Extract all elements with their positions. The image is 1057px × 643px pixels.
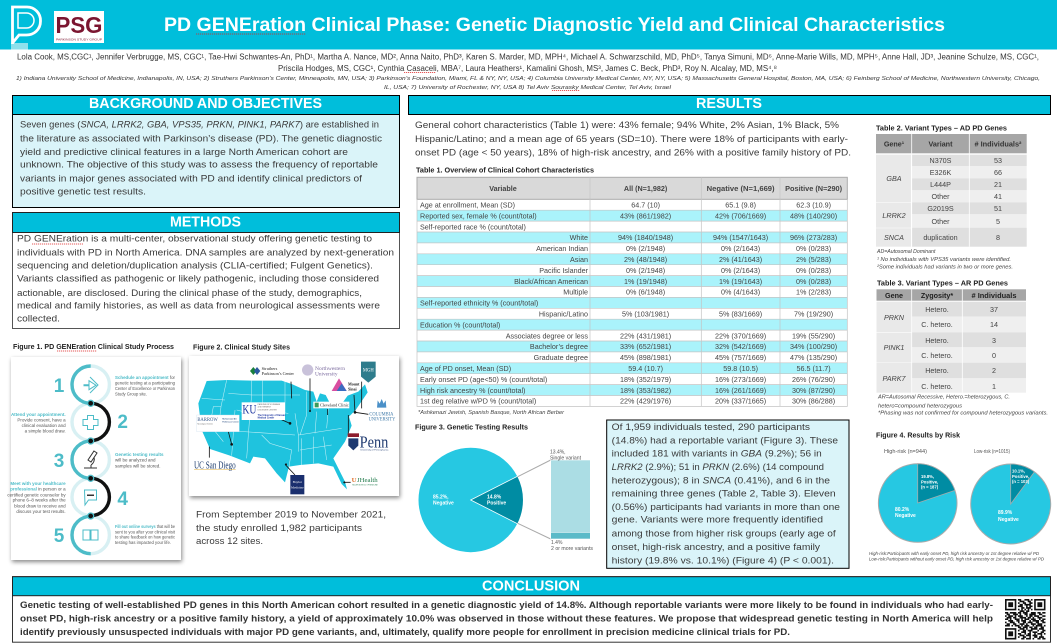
authors and affiliations [16, 52, 1040, 91]
table 2: variant types AD: Variant [929, 140, 953, 148]
table rows: Asian [570, 255, 588, 264]
pie chart: high risk: Positive, [921, 479, 938, 484]
table rows: Age at enrollment, Mean (SD) [420, 200, 515, 210]
table 2: variant types AD: duplication [923, 233, 958, 242]
QR code [1005, 599, 1046, 640]
table 2: variant types AD: 5 [996, 217, 1000, 226]
pie chart: high risk: (n = 187) [921, 484, 939, 490]
table rows [420, 200, 837, 406]
table header: All (N=1,982) [624, 184, 668, 193]
step 1 text [115, 375, 175, 396]
logo: Struthers Parkinson's Center [250, 366, 295, 376]
table rows: 22% (431/1981) [620, 331, 671, 340]
stacked bar: variant count: Single variant [550, 455, 582, 461]
text: methods: medical and family histories, as well as data from neurological assessments were [17, 301, 380, 312]
authors and affiliations: Lola Cook, MS,CGC¹, Jennifer Verbrugge, MS, CGC¹, Tae-Hwi Schwantes-An, PhD¹, Martha A. Nance, MD², Anna Naito, PhD³, Karen S. Marder, MD, MPH⁴, Michael A. Schwarzschild, MD, PhD⁵, Tanya Simuni, MD⁶, Anne-Marie Wills, MD, MPH⁵, Anne Hall, JD³, Jeanine Schulze, MS, CGC¹, [17, 52, 1039, 62]
table rows: Bachelor’s degree [530, 342, 588, 351]
panel: results text: LRRK2 (2.9%); 51 in PRKN (2.6%) (14 compound [612, 462, 824, 473]
text: methods: actionable, are disclosed. During the clinical phase of the study, demographics, [17, 288, 362, 299]
table rows: 0% (0/283) [796, 277, 831, 286]
figure 4 notes: High-risk:Participants with early onset PD, high risk ancestry or 1st degree relative w/ PD [869, 551, 1040, 556]
logo: Struthers Parkinson's Center: Struthers [262, 366, 278, 371]
table 2: variant types AD: G2019S [927, 204, 954, 213]
text: methods [17, 234, 394, 325]
pie chart: high risk: Negative [895, 513, 916, 519]
table 3: variant types AR: PINK1 [884, 343, 904, 352]
authors and affiliations: Priscila Hodges, MS, CGC¹, Cynthia Casaceli, MBA⁷, Laura Heathers¹, Kamalini Ghosh, MS³, James C. Beck, PhD³, Roy N. Alcalay, MD, MS⁴,⁸ [278, 64, 777, 73]
logo: Cleveland Clinic: Cleveland Clinic [320, 403, 349, 408]
icon: Parkinson's Foundation P logo [11, 7, 41, 50]
logo: PSG: PSG [56, 12, 102, 38]
table 3: variant types AR: Hetero. [925, 305, 949, 314]
table 3: variant types AR: 37 [990, 305, 998, 314]
table rows: 64.7 (10) [631, 200, 660, 210]
heading: methods: METHODS [170, 214, 241, 230]
table 2: variant types AD: Other [932, 192, 950, 201]
table 2 notes: ²Some individuals had variants in two or more genes. [877, 264, 1013, 270]
table rows: 33% (652/1981) [620, 342, 671, 351]
figure 4: results by risk [869, 431, 1051, 562]
table 1 footnote: *Ashkenazi Jewish, Spanish Basque, North African Berber [418, 410, 564, 416]
leader lines [209, 378, 368, 483]
table rows: 18% (353/1982) [620, 386, 671, 395]
table rows: High risk ancestry % (count/total) [420, 386, 525, 395]
logo: KU: PARKINSON'S DISEASE [258, 403, 281, 406]
caption: table 2: Table 2. Variant Types – AD PD Genes [876, 124, 1007, 133]
step 5 text: testing has impacted your life. [115, 540, 171, 545]
logo: Columbia University [369, 399, 396, 423]
logo: KU: The University of Kansas [258, 414, 286, 417]
table 3: variant types AR: # Individuals [972, 291, 1016, 300]
table rows: 16% (261/1669) [715, 386, 766, 395]
table rows: 22% (429/1976) [620, 397, 671, 406]
table rows: 42% (706/1669) [715, 211, 766, 220]
table rows: Education % (count/total) [420, 320, 500, 329]
text: methods: collected. [17, 314, 60, 325]
step 2 text: Provide consent, have a [17, 418, 66, 422]
table header: Negative (N=1,669) [707, 184, 775, 193]
pie chart: low risk: Low-risk (n=1015) [974, 449, 1010, 455]
caption: figure 1: Figure 1. PD GENEration Clinical Study Process [13, 342, 174, 351]
table rows: 30% (86/288) [792, 397, 835, 406]
table rows: 18% (352/1979) [620, 375, 671, 384]
table rows: 1% (2/283) [796, 288, 831, 297]
step numbers: 2 [117, 412, 128, 433]
panel: results text: history (19.8% vs. 10.1%) (Figure 4) (P < 0.001). [612, 555, 834, 566]
logo: Mount Sinai: Sinai [348, 387, 358, 392]
table 2: variant types AD: Gene¹ [884, 140, 905, 148]
table rows: 94% (1547/1643) [713, 233, 768, 242]
logo: Northwestern University: University [315, 372, 338, 378]
step numbers: 1 [54, 376, 65, 397]
header band [0, 0, 1057, 50]
caption: figure 3: Figure 3. Genetic Testing Results [415, 422, 528, 431]
step 4 text: professional in person or a [10, 486, 66, 492]
logo: Baylor Medicine [290, 475, 304, 494]
logo: KU: Medical Center [258, 417, 274, 420]
figure 1: clinical study process [7, 342, 181, 560]
table 3: variant types AR: 1 [992, 382, 996, 391]
table rows: Reported sex, female % (count/total) [420, 211, 537, 220]
logo: UHealth: JHealth [357, 477, 378, 484]
table rows: 59.8 (10.5) [723, 364, 758, 373]
caption: table 3: Table 3. Variant Types – AR PD Genes [877, 279, 1008, 288]
pie chart: low risk: (n = 103) [1012, 479, 1030, 484]
logo: MGH [361, 362, 376, 383]
logo: Struthers Parkinson's Center: Parkinson’s Center [262, 371, 295, 376]
text: enrollment: From September 2019 to November 2021, [196, 510, 386, 521]
table 2: variant types AD: 66 [994, 168, 1002, 177]
logo: PSG: PARKINSON STUDY GROUP [56, 38, 102, 42]
table header [417, 177, 847, 199]
logo: UC San Diego: UC San Diego [194, 460, 236, 471]
logo: Penn: Penn [360, 433, 389, 452]
table rows: Self-reported ethnicity % (count/total) [420, 299, 538, 308]
table rows: 0% (2/1643) [721, 266, 760, 275]
table 3: variant types AR [876, 279, 1048, 416]
pie chart: high risk [878, 449, 957, 542]
step 3 text [115, 452, 164, 468]
text: background: variants in major genes associated with PD and identify clinical predictors of [20, 174, 362, 185]
pie chart: high risk: 80.2% [895, 507, 910, 513]
step 1 text: Study Group site. [115, 392, 147, 396]
step 3 text: Genetic testing results [115, 452, 164, 457]
table 2: variant types AD: 8 [996, 233, 1000, 242]
map of United States with site logos [194, 362, 396, 494]
text: conclusion: identify previously unsuspected individuals with major PD gene variants, and, ultimately, qualify more people for enrollment in precision medicine clinical trials for PD. [20, 627, 790, 637]
panel: background and objectives [12, 95, 400, 208]
text: methods: individuals with PD in North America. DNA samples are analyzed by next-generation [17, 248, 394, 259]
pie chart: low risk: Positive, [1012, 474, 1029, 479]
logo: UHealth: MILLER SCHOOL OF MEDICINE [352, 484, 379, 486]
table rows: 96% (273/283) [790, 233, 837, 242]
table rows: 0% (2/1948) [626, 244, 665, 253]
table rows: 2% (5/283) [796, 255, 831, 264]
step numbers [54, 376, 128, 547]
stacked bar: variant count: 2 or more variants [551, 546, 594, 552]
step numbers: 4 [117, 489, 128, 510]
table rows: 1% (19/1643) [719, 277, 762, 286]
panel: conclusion [12, 577, 1050, 642]
table 3: variant types AR: 3 [992, 336, 996, 345]
panel: results text: remaining three genes (Table 2, Table 3). Eleven [612, 489, 836, 500]
pie chart: Positive [487, 500, 506, 506]
table 2: variant types AD: L444P [930, 180, 951, 189]
table 2: variant types AD: 53 [994, 156, 1002, 165]
figure 3: genetic testing results [415, 422, 594, 553]
step 3 text: will be analyzed and [115, 458, 156, 462]
stacked bar: variant count: 13.4%, [550, 449, 566, 455]
pie chart: low risk: 89.9% [998, 510, 1013, 516]
step 4 text: certified genetic counselor by [7, 492, 66, 497]
step 4 text: phone 6–8 weeks after the [13, 498, 66, 502]
table rows: 20% (337/1665) [715, 397, 766, 406]
panel: results text: included 181 with variants in GBA (9.2%); 56 in [612, 449, 822, 460]
panel: results text: (0.56%) participants had variants in more than one [612, 502, 840, 513]
panel: results header [408, 95, 1050, 114]
table rows: Early onset PD (age<50) % (count/total) [420, 375, 547, 384]
text: background: yield and predictive clinical features in a large North American cohort are [20, 147, 348, 158]
text: enrollment [196, 510, 386, 547]
logo: Mount Sinai: Mount [348, 382, 360, 387]
table 3: variant types AR: 2 [992, 366, 996, 375]
table rows: 0% (4/1643) [721, 288, 760, 297]
pie chart: low risk: 10.1%, [1012, 469, 1025, 474]
table 3: variant types AR: 0 [992, 351, 996, 360]
step 4 text: discuss your test results. [16, 509, 66, 514]
logo: Columbia University: UNIVERSITY [369, 418, 396, 423]
table rows: Multiple [563, 288, 588, 297]
table 3: variant types AR: 14 [990, 320, 998, 329]
text: general cohort characteristics: Hispanic/Latino; and a mean age of 65 years (SD=10). There were 18% of participants with early- [415, 134, 848, 145]
step 5 text: sent to you after your clinical visit [115, 529, 176, 534]
heading: conclusion: CONCLUSION [482, 578, 580, 594]
table rows: 5% (103/1981) [622, 310, 669, 318]
step 1 text: Schedule an appointment for [115, 375, 175, 380]
logo: Barrow [197, 415, 239, 432]
step 4 text: blood draw to receive and [14, 503, 66, 508]
logo: Cleveland Clinic [313, 402, 349, 408]
table 3 notes: AR=Autosomal Recessive, Hetero.=heterozygous, C. [877, 394, 1010, 400]
pie chart: 14.8% [487, 494, 502, 500]
table 3: variant types AR: PRKN [884, 313, 905, 322]
table rows: Age of PD onset, Mean (SD) [420, 364, 511, 373]
panel: results text: heterozygous); 8 in SNCA (0.41%), and 6 in the [612, 475, 830, 486]
text: background: the literature as associated with Parkinson’s disease (PD). The genetic diagnostic [20, 134, 382, 145]
logo: Baylor Medicine: Baylor [293, 480, 303, 484]
logo: Columbia University: COLUMBIA [369, 412, 394, 417]
table rows: 5% (83/1669) [719, 310, 762, 318]
logo: KU: KU [242, 403, 256, 417]
step 2 text: clinical evaluation and [22, 423, 66, 428]
panel: results text: gene. Variants were more frequently identified [612, 514, 823, 525]
step 2 text: a simple blood draw. [25, 428, 66, 433]
step 5 text [115, 524, 176, 545]
table header: Variable [489, 184, 517, 193]
heading: background and objectives: BACKGROUND AND OBJECTIVES [89, 95, 322, 112]
authors and affiliations: 1) Indiana University School of Medicine, Indianapolis, IN, USA; 2) Struthers Parkinson’s Center, Minneapolis, MN, USA; 3) Parkinson’s Foundation, Miami, FL & NY, NY, USA; 4) Columbia University Medical Center, NY, NY, USA; 5) Massachusetts General Hospital, Boston, MA, USA; 6) Feinberg School of Medicine, Northwestern University, Chicago, [16, 76, 1040, 82]
table 3: variant types AR: C. hetero. [921, 382, 953, 391]
table 1: clinical cohort characteristics [416, 166, 847, 416]
table rows: American Indian [536, 244, 588, 253]
text: background: Seven genes (SNCA, LRRK2, GBA, VPS35, PRKN, PINK1, PARK7) are established in [20, 120, 379, 131]
table 2: variant types AD: LRRK2 [882, 211, 906, 220]
pie chart [418, 447, 523, 553]
table rows: 7% (19/290) [794, 310, 833, 318]
logo: Barrow: Neurological Institute [197, 423, 213, 426]
caption: table 1: Table 1. Overview of Clinical Cohort Characteristics [416, 166, 594, 175]
table rows: 56.5 (11.7) [796, 364, 831, 373]
step 3 text: samples will be stored. [115, 463, 161, 468]
logo: Northwestern University: Northwestern [315, 366, 345, 372]
step icons [83, 377, 98, 540]
logo: UC San Diego [194, 460, 236, 471]
table rows: 0% (6/1948) [626, 288, 665, 297]
logo: Penn [348, 433, 389, 452]
caption: figure 2: Figure 2. Clinical Study Sites [193, 342, 290, 351]
step 4 text: Meet with your healthcare [10, 481, 66, 486]
step 1 text: genetic testing at a participating [115, 380, 175, 385]
logo: Mount Sinai [332, 378, 360, 392]
table rows: 16% (273/1669) [715, 375, 766, 384]
table rows: Self-reported race % (count/total) [420, 222, 526, 231]
table header: Positive (N=290) [785, 184, 843, 193]
table rows: 19% (55/290) [792, 331, 835, 340]
logo: Barrow: Muhammad Ali [222, 418, 237, 421]
text: methods: sequencing and deletion/duplication analysis (CLIA-certified; Fulgent Genetics). [17, 261, 373, 272]
table rows: 22% (370/1669) [715, 331, 766, 340]
table 3: variant types AR: Gene [885, 291, 903, 300]
table 2: variant types AD: GBA [886, 174, 902, 183]
logo: UHealth: U [352, 477, 357, 484]
step 2 text: Attend your appointment. [11, 412, 66, 417]
table 2: variant types AD: Other [932, 217, 950, 226]
logo: KU: & MOVEMENT [258, 407, 272, 409]
table 3: variant types AR: Hetero. [925, 336, 949, 345]
table rows: 45% (898/1981) [620, 353, 671, 362]
text: general cohort characteristics: General cohort characteristics (Table 1) were: 43% female; 94% White, 2% Asian, 1% Black, 5% [415, 120, 840, 131]
table 3: variant types AR: C. hetero. [921, 320, 953, 329]
table rows: Black/African American [514, 277, 588, 286]
table rows: 0% (0/283) [796, 244, 831, 253]
table rows: Hispanic/Latino [539, 310, 588, 318]
table rows: Associates degree or less [506, 331, 588, 340]
panel: results text: Of 1,959 individuals tested, 290 participants [612, 422, 810, 433]
table 2: variant types AD: N370S [930, 156, 952, 165]
table rows: 62.3 (10.9) [796, 200, 831, 210]
text: enrollment: the study enrolled 1,982 participants [196, 523, 362, 534]
table rows: 2% (41/1643) [719, 255, 762, 264]
authors and affiliations: IL, USA; 7) University of Rochester, NY, USA 8) Tel Aviv Sourasky Medical Center, Tel Aviv, Israel [384, 85, 672, 91]
logo: Baylor Medicine: Medicine [291, 485, 304, 489]
table rows: 2% (48/1948) [624, 255, 667, 264]
logo: KU: DISORDER CENTER [258, 409, 277, 411]
logo: Barrow: BARROW [197, 418, 218, 423]
table rows: 43% (861/1982) [620, 211, 671, 220]
table rows: 47% (135/290) [790, 353, 837, 362]
table 3: variant types AR: C. hetero. [921, 351, 953, 360]
text: general cohort characteristics [415, 120, 851, 159]
table rows: 1% (19/1948) [624, 277, 667, 286]
panel: methods [12, 212, 400, 328]
table rows: 48% (140/290) [790, 211, 837, 220]
logo: KU [242, 402, 286, 420]
text: conclusion [20, 600, 993, 637]
table 3 notes: hetero=compound heterozygous [878, 403, 962, 409]
text: methods: Variants classified as pathogenic or likely pathogenic, including those considered [17, 274, 379, 285]
panel: results text [607, 420, 849, 568]
text: background: unknown. The objective of this study was to assess the frequency of reportable [20, 160, 378, 171]
panel: results text: (14.8%) had a reportable variant (Figure 3). These [612, 435, 838, 446]
table 3: variant types AR: Zygosity* [921, 291, 953, 300]
process rings [72, 366, 109, 554]
table rows: 1st deg relative w/PD % (count/total) [420, 397, 536, 406]
panel: results text: onset, high-risk ancestry, and a positive family [612, 542, 820, 553]
text: general cohort characteristics: onset PD (age < 50 years), 18% of high-risk ancestry, and 26% with a positive family history of PD. [415, 148, 851, 159]
text: conclusion: onset PD, high-risk ancestry or a positive family history, a yield of approximately 10.0% was observed in those without these features. We propose that widespread genetic testing in North America will help [20, 614, 993, 624]
table rows: 45% (757/1669) [715, 353, 766, 362]
table 2: variant types AD: E326K [930, 168, 951, 177]
table rows: 30% (87/290) [792, 386, 835, 395]
table 3: variant types AR: PARK7 [882, 374, 907, 383]
text: background: positive genetic test results. [20, 187, 146, 198]
figure 4 notes: Low-risk:Participants without early onset PD, high risk ancestry or 1st degree relative w/ PD [869, 557, 1045, 562]
step 5 text: to share feedback on how genetic [115, 535, 176, 540]
table 3 notes [877, 394, 1048, 416]
logo: Barrow: Parkinson Center [222, 421, 239, 424]
step 2 text [11, 412, 66, 433]
table 2: variant types AD: SNCA [884, 233, 904, 242]
pie chart: high risk: 19.8%, [921, 474, 934, 479]
table rows: 65.1 (9.8) [725, 200, 756, 210]
table rows: 34% (100/290) [790, 342, 837, 351]
pie chart: Negative [433, 500, 454, 506]
table rows: 59.4 (10.7) [628, 364, 663, 373]
stacked bar: variant count: 1.4% [551, 540, 563, 546]
table 2: variant types AD: 51 [994, 204, 1002, 213]
logo: UHealth [352, 477, 379, 486]
table rows: 0% (2/1948) [626, 266, 665, 275]
pie chart: low risk: Negative [998, 517, 1019, 523]
step 1 text: Center of Excellence or Parkinson [115, 386, 175, 391]
table 2: variant types AD: # Individuals² [974, 140, 1022, 148]
table rows: Graduate degree [534, 353, 588, 362]
table rows: 0% (0/283) [796, 266, 831, 275]
stacked bar: variant count [550, 449, 594, 552]
figure 4 notes [869, 551, 1045, 562]
table 2: variant types AD: 21 [994, 180, 1002, 189]
step numbers: 5 [54, 526, 65, 547]
panel: results text: among those from higher risk groups (early age of [612, 529, 836, 540]
step numbers: 3 [54, 451, 64, 472]
logo: MGH: MGH [363, 369, 374, 374]
text: background [20, 120, 382, 198]
table 3: variant types AR: Hetero. [925, 366, 949, 375]
panel: results header: RESULTS [696, 95, 762, 112]
table 2 notes: AD=Autosomal Dominant [876, 249, 936, 255]
table 3 notes: *Phasing was not confirmed for compound heterozygous variants. [878, 410, 1048, 416]
table rows: 32% (542/1669) [715, 342, 766, 351]
table 2: variant types AD: 41 [994, 192, 1002, 201]
step 5 text: Fill out online surveys that will be [115, 524, 175, 529]
table rows: 26% (76/290) [792, 375, 835, 384]
table 2 notes [876, 249, 1013, 270]
title: PD GENEration Clinical Phase: Genetic Diagnostic Yield and Clinical Characteristics [164, 14, 945, 36]
table rows: Pacific Islander [539, 266, 589, 275]
caption: figure 4: Figure 4. Results by Risk [876, 431, 961, 440]
pie chart: high risk: High-risk (n=944) [884, 449, 927, 455]
logo: Penn: University of Pennsylvania [360, 449, 389, 452]
table rows: 0% (2/1643) [721, 244, 760, 253]
text: methods: PD GENEration is a multi-center, observational study offering genetic testing to [17, 234, 372, 245]
text: conclusion: Genetic testing of well-established PD genes in this North American cohort resulted in a genetic diagnostic yield of 14.8%. Although reportable variants were more likely to be found in individuals who had early- [20, 600, 993, 610]
table 2 notes: ¹ No individuals with VPS35 variants were identified. [877, 257, 1011, 263]
figure 2: clinical study sites [189, 342, 399, 547]
table 2: variant types AD [876, 124, 1027, 270]
table rows: 94% (1840/1948) [618, 233, 673, 242]
pie chart: 85.2%, [433, 494, 449, 500]
table rows: White [570, 233, 588, 242]
logo: Northwestern University [302, 364, 345, 378]
pie chart: low risk [971, 449, 1051, 544]
step 4 text [7, 481, 66, 514]
text: enrollment: across 12 sites. [196, 536, 263, 547]
cyan row shading [417, 210, 847, 396]
